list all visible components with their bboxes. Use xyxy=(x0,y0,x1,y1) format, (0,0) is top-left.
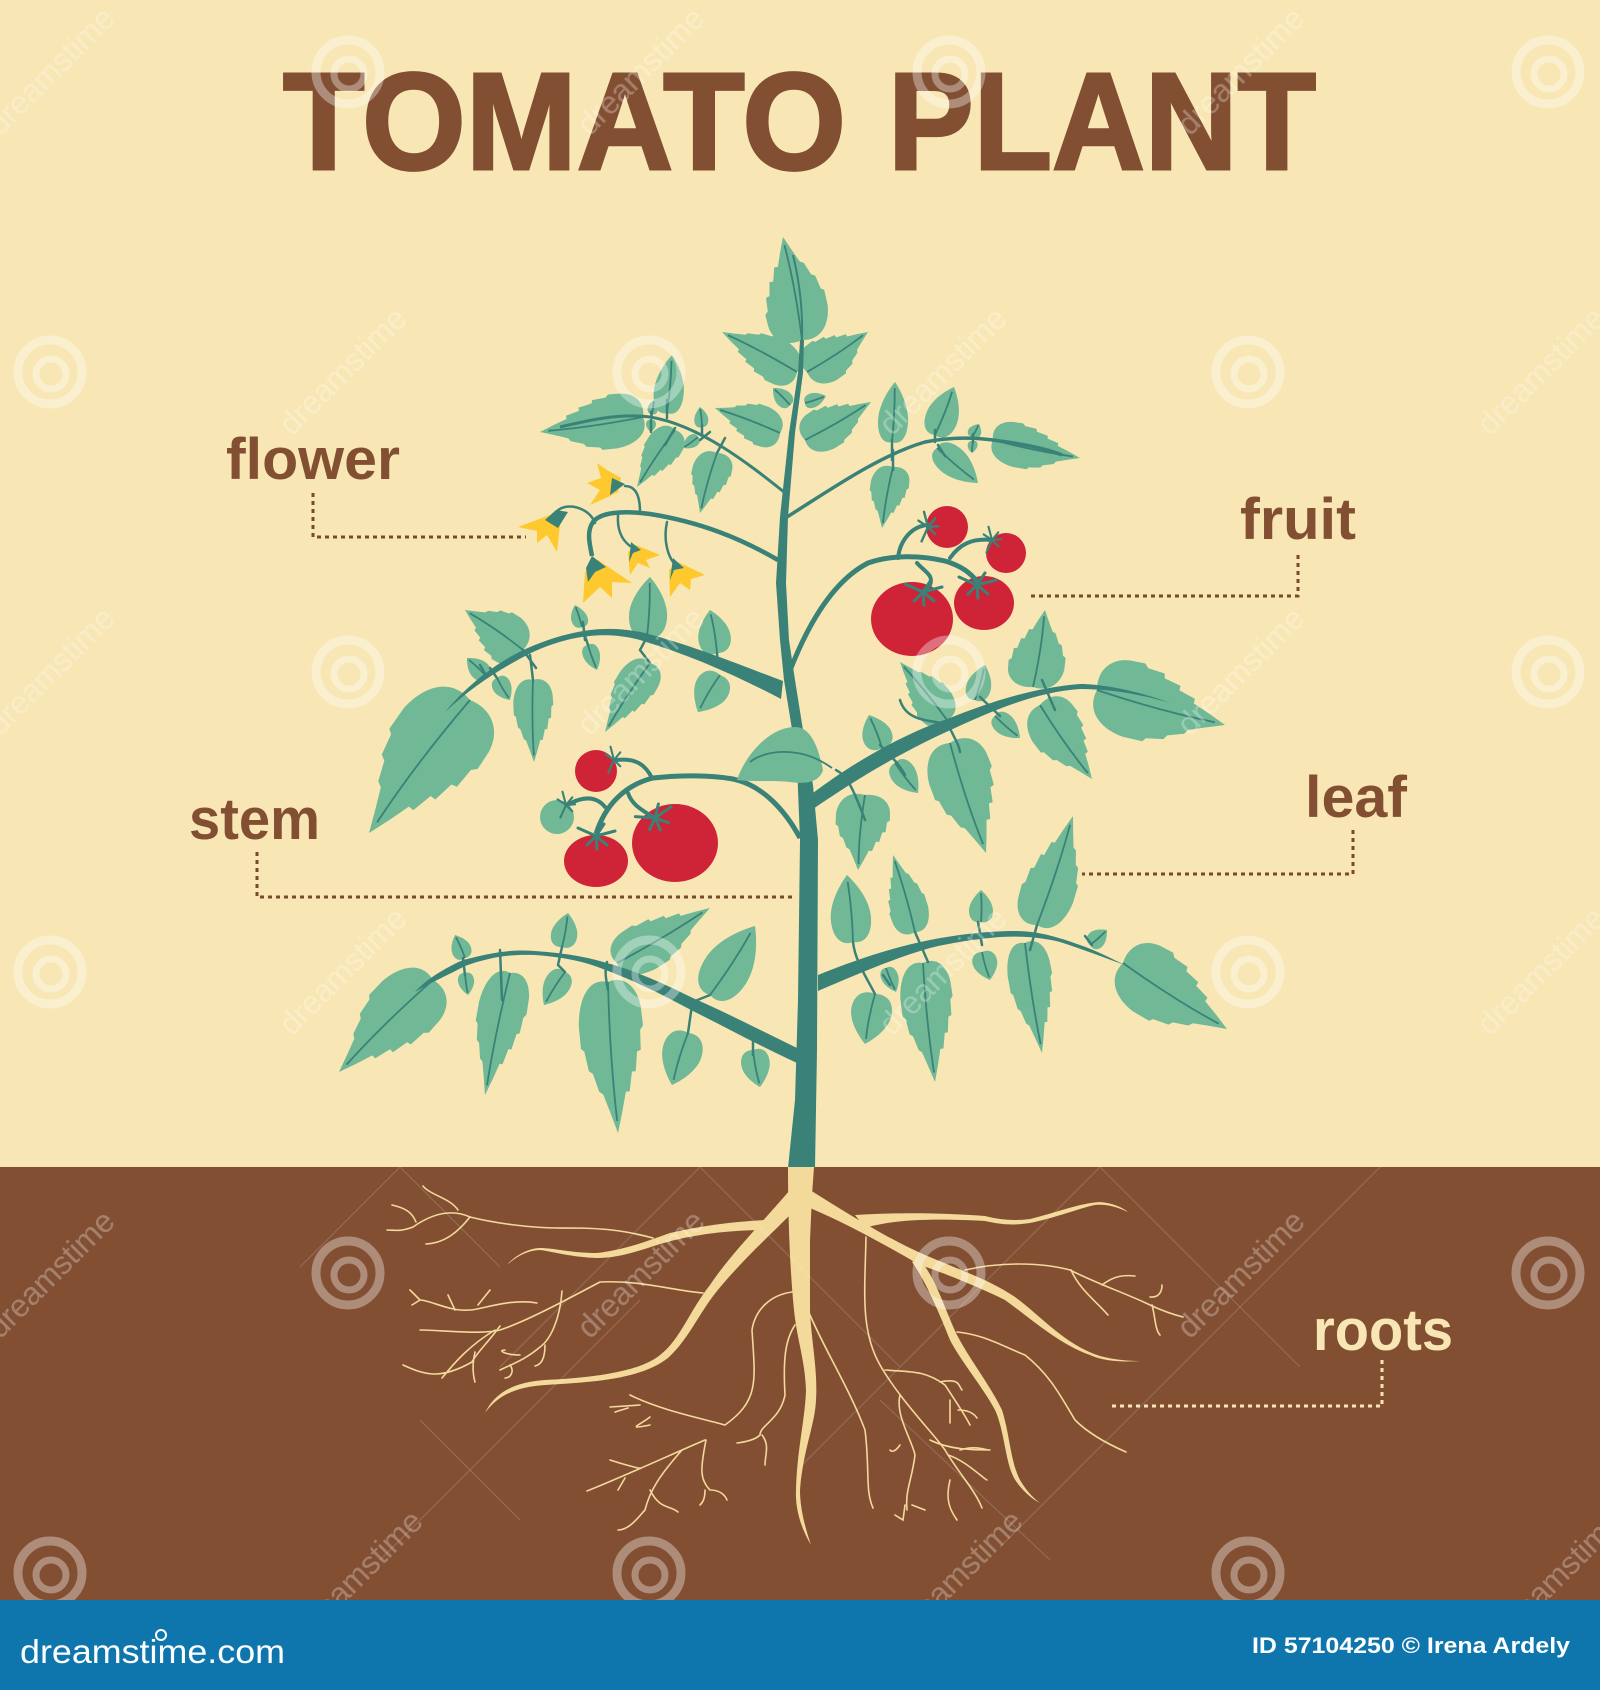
label: leaf: leaf xyxy=(1305,765,1408,830)
label: fruit xyxy=(1027,487,1356,596)
leaves: upper right branch xyxy=(863,381,1084,531)
watermark text: dreamstime xyxy=(871,300,1014,442)
watermark text: dreamstime xyxy=(271,900,414,1042)
watermark text: dreamstime xyxy=(271,300,414,442)
tomatoes: left cluster xyxy=(540,750,718,887)
branch: left fruit xyxy=(596,776,800,838)
label: stem: stem xyxy=(189,787,320,852)
branch: upper left xyxy=(560,416,784,492)
leaves: upper left branch xyxy=(536,354,736,518)
branch: lower right xyxy=(818,931,1125,991)
label: stem xyxy=(189,787,793,897)
leaves: lower left branch xyxy=(315,887,775,1135)
soil panel xyxy=(0,1167,1600,1600)
roots xyxy=(387,1167,1183,1545)
left main root xyxy=(485,1190,790,1413)
watermark text: dreamstime xyxy=(887,1503,1030,1645)
label: flower xyxy=(226,427,526,537)
fruit stalks and calyxes xyxy=(558,512,1001,849)
main stem xyxy=(776,340,818,1168)
flower stalks and calyxes xyxy=(545,478,684,582)
tomatoes: right cluster xyxy=(871,506,1026,656)
branch: middle right xyxy=(813,684,1170,809)
left upper root xyxy=(507,1220,770,1265)
watermark text: dreamstime xyxy=(287,1503,430,1645)
plant stems and branches xyxy=(415,255,1170,1168)
title: TOMATO xyxy=(283,45,846,199)
fine rootlets left xyxy=(387,1186,795,1530)
background sky xyxy=(0,0,1600,1167)
footer bar xyxy=(0,1600,1600,1690)
covering leaf at stem xyxy=(737,727,832,783)
leaves: middle left branch xyxy=(331,576,735,862)
leaves: lower right branch xyxy=(827,808,1246,1085)
right main root xyxy=(810,1190,1140,1361)
right upper root xyxy=(855,1202,1128,1228)
top leaf midrib xyxy=(793,255,802,340)
branch: right fruit xyxy=(791,557,978,668)
right lower root xyxy=(912,1258,1040,1503)
watermark text: dreamstime xyxy=(569,1203,712,1345)
branch: middle left xyxy=(445,629,783,712)
leaf petioles xyxy=(433,400,1092,1055)
title: PLANT xyxy=(888,45,1316,199)
leaves: top cluster xyxy=(708,231,882,459)
label: flower: flower xyxy=(226,427,400,492)
watermark text: dreamstime xyxy=(1169,1203,1312,1345)
label: roots xyxy=(1112,1298,1453,1406)
watermark text: dreamstime xyxy=(569,600,712,742)
label: leaf xyxy=(1082,765,1408,874)
flowers: yellow blossoms xyxy=(518,463,705,603)
branch: upper right xyxy=(787,438,1062,517)
leaves: middle right branch xyxy=(831,606,1235,873)
branch: lower left xyxy=(415,950,797,1063)
footer: site name: dreamstime.com xyxy=(20,1633,285,1670)
branch: flower xyxy=(589,512,778,560)
watermark text: dreamstime xyxy=(871,900,1014,1042)
label: fruit: fruit xyxy=(1240,487,1356,552)
taproot xyxy=(788,1167,816,1545)
footer: image id and credit: ID 57104250 © Irena Ardely xyxy=(1252,1633,1571,1658)
title xyxy=(283,45,1316,199)
fine rootlets right xyxy=(810,1237,1183,1520)
watermark text: dreamstime xyxy=(1169,600,1312,742)
watermark text: dreamstime xyxy=(1169,0,1312,142)
label: roots: roots xyxy=(1313,1298,1453,1363)
watermark text: dreamstime xyxy=(569,0,712,142)
